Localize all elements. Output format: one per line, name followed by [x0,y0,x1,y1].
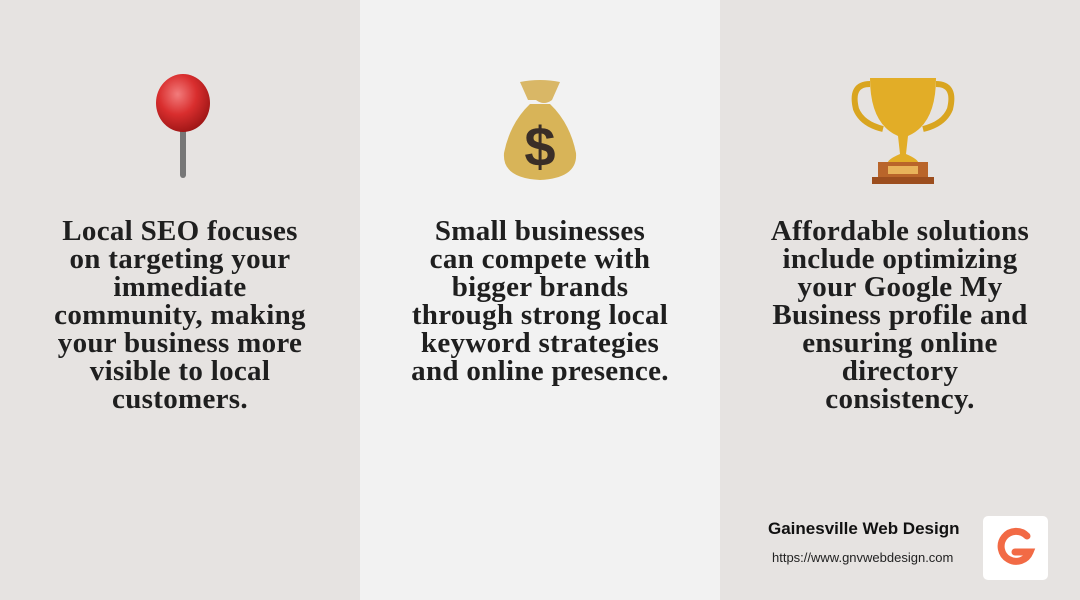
text: local SEO: your business more [58,327,302,359]
text: affordable solutions: ensuring online [802,327,998,359]
text: affordable solutions: your Google My [797,271,1003,303]
text: affordable solutions: include optimizing [782,243,1018,275]
panel: affordable solutions [720,0,1080,600]
text: local SEO: community, making [54,299,306,331]
icon: money bag [504,80,576,180]
text: local SEO [54,215,306,415]
text: small businesses: bigger brands [452,271,628,303]
icon: pushpin [156,74,210,178]
panel: local SEO [0,0,360,600]
text: affordable solutions: Affordable solutions [771,215,1029,247]
icon: trophy [852,78,954,184]
text: small businesses: keyword strategies [421,327,659,359]
text: affordable solutions [771,215,1029,415]
brand url: https://www.gnvwebdesign.com [772,550,953,565]
icon: money bag: $ [524,115,556,178]
text: local SEO: Local SEO focuses [62,215,298,247]
text: small businesses [411,215,669,387]
text: affordable solutions: consistency. [825,383,975,415]
text: affordable solutions: directory [842,355,958,387]
text: small businesses: can compete with [430,243,650,275]
text: local SEO: immediate [113,271,247,303]
brand name: Gainesville Web Design [768,519,959,538]
text: small businesses: and online presence. [411,355,669,387]
text: local SEO: visible to local [90,355,270,387]
panel: small businesses [360,0,720,600]
text: affordable solutions: Business profile and [772,299,1028,331]
text: local SEO: on targeting your [70,243,290,275]
text: local SEO: customers. [112,383,248,415]
text: small businesses: Small businesses [435,215,645,247]
text: small businesses: through strong local [412,299,668,331]
logo [983,516,1048,580]
brand footer [768,516,1048,580]
